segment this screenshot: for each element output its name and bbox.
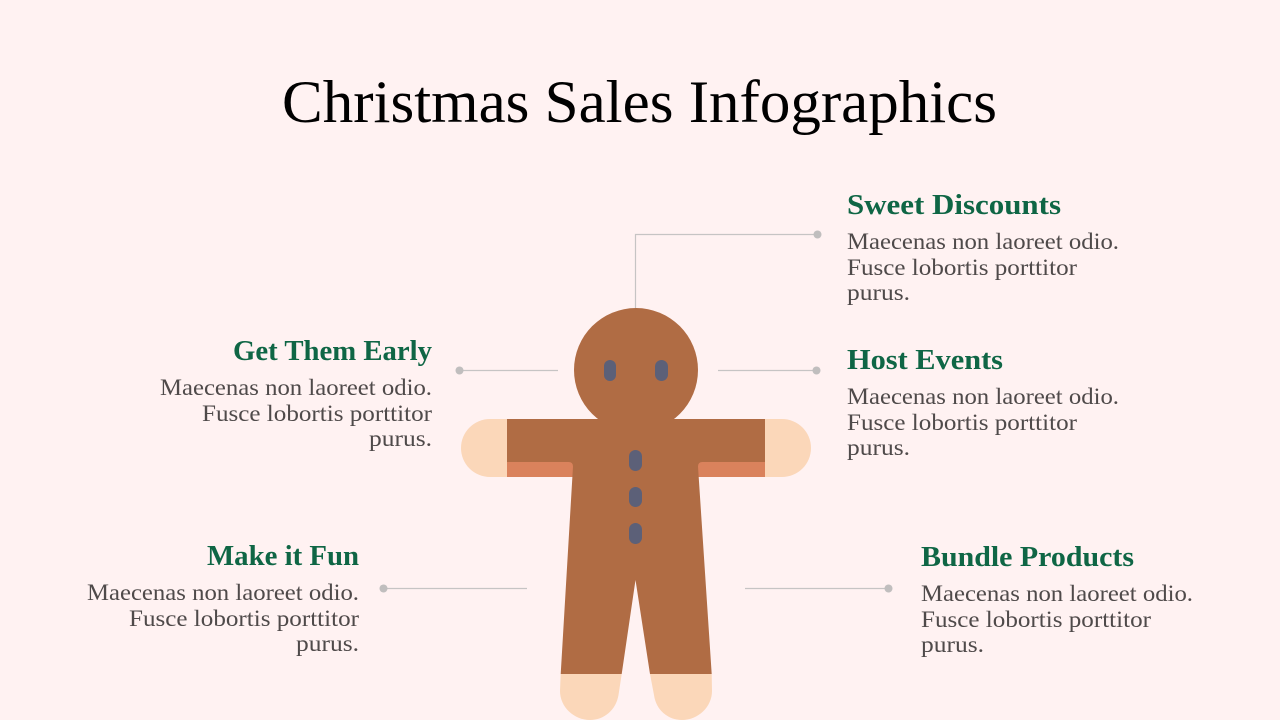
text block: make it fun: Fusce lobortis porttitor (129, 606, 359, 631)
text block: get them early: Maecenas non laoreet odio. (160, 375, 432, 400)
icon: right sleeve trim (695, 462, 765, 477)
connector: get them early (456, 366, 558, 374)
icon: left hand (461, 419, 507, 477)
text block: bundle products: Maecenas non laoreet odio. (921, 581, 1193, 606)
icon: right foot (650, 674, 712, 720)
text block: sweet discounts: Maecenas non laoreet odio. (847, 229, 1119, 254)
gingerbread man (461, 308, 811, 720)
text block: bundle products: Fusce lobortis porttitor (921, 607, 1151, 632)
icon: left eye (604, 360, 616, 381)
text block: make it fun (87, 540, 359, 656)
icon: button 2 (629, 487, 642, 507)
text block: host events (847, 344, 1119, 460)
text block: host events: Maecenas non laoreet odio. (847, 384, 1119, 409)
text block: host events: Fusce lobortis porttitor (847, 410, 1077, 435)
text block: bundle products: Bundle Products (921, 541, 1134, 573)
text block: host events: purus. (847, 435, 910, 460)
icon: button 1 (629, 450, 642, 471)
text block: bundle products: purus. (921, 632, 984, 657)
text block: host events: Host Events (847, 344, 1003, 376)
icon: right eye (655, 360, 668, 381)
icon: right hand (765, 419, 811, 477)
text block: make it fun: Make it Fun (207, 540, 359, 572)
text block: get them early: Get Them Early (233, 335, 432, 367)
text block: get them early (160, 335, 432, 451)
connector: bundle products (745, 584, 892, 592)
icon: head (574, 308, 698, 432)
title: Christmas Sales Infographics (282, 69, 997, 135)
text block: get them early: Fusce lobortis porttitor (202, 401, 432, 426)
connector: host events (718, 366, 820, 374)
text block: sweet discounts: purus. (847, 280, 910, 305)
text block: get them early: purus. (369, 426, 432, 451)
text block: sweet discounts: Sweet Discounts (847, 189, 1061, 221)
icon: left sleeve trim (507, 462, 577, 477)
icon: button 3 (629, 523, 642, 544)
connector: make it fun (380, 584, 527, 592)
text block: sweet discounts: Fusce lobortis porttitor (847, 255, 1077, 280)
connector: sweet discounts (636, 230, 822, 308)
text block: make it fun: Maecenas non laoreet odio. (87, 580, 359, 605)
text block: sweet discounts (847, 189, 1119, 305)
text block: bundle products (921, 541, 1193, 657)
icon: body (507, 419, 765, 674)
icon: left foot (560, 674, 622, 720)
text block: make it fun: purus. (296, 631, 359, 656)
